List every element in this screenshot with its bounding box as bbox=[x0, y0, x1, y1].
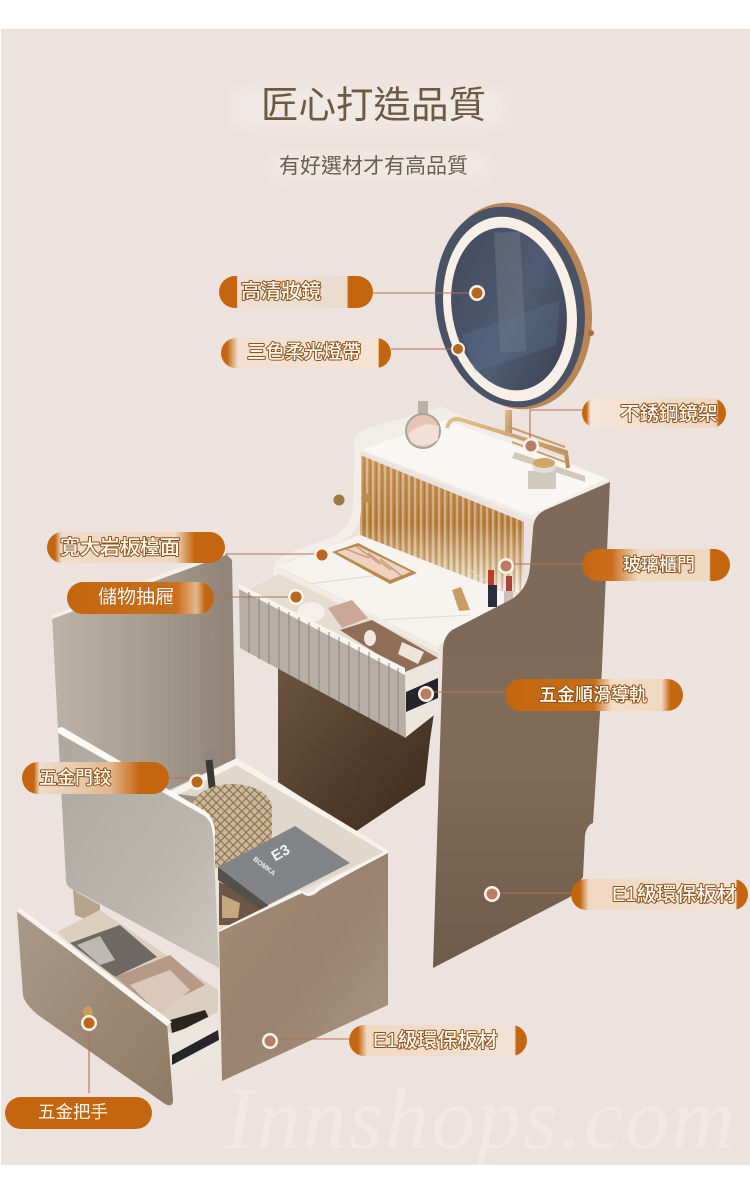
callout: 不銹鋼鏡架: 不銹鋼鏡架 bbox=[620, 403, 718, 425]
callout: 高清妝鏡: 高清妝鏡 bbox=[241, 280, 321, 303]
drawer interior bbox=[250, 574, 438, 672]
watermark: Innshops.com bbox=[224, 1071, 735, 1168]
dresser back panel of stool bbox=[52, 551, 236, 892]
marble desktop bbox=[277, 535, 525, 653]
fluted drawer front bbox=[239, 584, 406, 738]
callout: 五金門鉸: 五金門鉸 bbox=[39, 768, 111, 788]
dot: right board bbox=[484, 886, 500, 902]
jewellery contents bbox=[219, 882, 268, 925]
dot: light strip bbox=[451, 342, 465, 356]
fluted glass door bbox=[360, 455, 524, 592]
callout: 五金順滑導軌: 五金順滑導軌 bbox=[539, 685, 647, 705]
callout: 三色柔光燈帶 bbox=[221, 338, 391, 368]
leader lines bbox=[89, 293, 582, 1093]
hinge bbox=[202, 749, 215, 800]
callout: 五金把手 bbox=[5, 1097, 152, 1129]
callout: 儲物抽屜 bbox=[67, 582, 214, 614]
dot: rail bbox=[418, 686, 434, 702]
callout: 儲物抽屜: 儲物抽屜 bbox=[98, 586, 174, 608]
callout: 玻璃櫃門: 玻璃櫃門 bbox=[623, 555, 695, 575]
round patterned box bbox=[192, 784, 272, 868]
grey box: E3 bbox=[269, 841, 293, 865]
dot: glass door bbox=[498, 558, 514, 574]
callout: 寬大岩板檯面 bbox=[47, 532, 225, 563]
dot: mirror frame bbox=[523, 438, 539, 454]
stool right face bbox=[219, 852, 388, 1081]
callout: 不銹鋼鏡架 bbox=[582, 398, 726, 428]
dot: box board bbox=[262, 1033, 278, 1049]
grey box: BOMKA bbox=[251, 856, 277, 878]
lower drawer front bbox=[17, 908, 173, 1105]
callout: 五金把手: 五金把手 bbox=[38, 1102, 108, 1122]
dot: desktop bbox=[314, 547, 330, 563]
lower drawer slide bbox=[170, 1012, 220, 1087]
callout: 玻璃櫃門 bbox=[582, 549, 730, 581]
dot: drawer bbox=[288, 589, 304, 605]
callout: 寬大岩板檯面: 寬大岩板檯面 bbox=[60, 536, 180, 559]
upper shelf frame bbox=[353, 407, 610, 520]
right side panel E1 board bbox=[433, 482, 610, 968]
dark dresser body bbox=[278, 640, 436, 832]
callout: 五金順滑導軌 bbox=[505, 679, 683, 711]
round LED mirror bbox=[420, 190, 608, 422]
cosmetic jar bbox=[528, 458, 556, 489]
callout: E1級環保板材 bottom: E1級環保板材 bbox=[373, 1029, 497, 1052]
marker dots bbox=[81, 285, 539, 1049]
dot: mirror bbox=[469, 285, 485, 301]
stool base post bbox=[73, 890, 100, 925]
dot: hinge bbox=[189, 774, 205, 790]
drawer slide bbox=[405, 660, 438, 738]
callout: 高清妝鏡 bbox=[219, 276, 373, 308]
lower drawer interior bbox=[57, 910, 218, 1033]
grey box bbox=[218, 826, 350, 915]
side panel knobs bbox=[334, 494, 539, 589]
white side frame bbox=[273, 440, 361, 640]
callout: E1級環保板材 bottom bbox=[349, 1025, 527, 1056]
eyeshadow palette bbox=[332, 543, 417, 584]
mirror stand bbox=[447, 410, 585, 482]
callout: 三色柔光燈帶: 三色柔光燈帶 bbox=[247, 341, 361, 363]
stool box interior bbox=[165, 758, 388, 930]
title: 匠心打造品質 bbox=[261, 84, 486, 126]
subtitle: 有好選材才有高品質 bbox=[279, 155, 468, 178]
stool lid panel bbox=[58, 730, 219, 968]
perfume bottle bbox=[406, 401, 440, 448]
lipsticks and gold box bbox=[452, 570, 513, 611]
callout: E1級環保板材 right: E1級環保板材 bbox=[612, 883, 736, 906]
dot: handle bbox=[81, 1015, 97, 1031]
callout: 五金門鉸 bbox=[22, 762, 169, 794]
callout: E1級環保板材 right bbox=[571, 879, 748, 910]
